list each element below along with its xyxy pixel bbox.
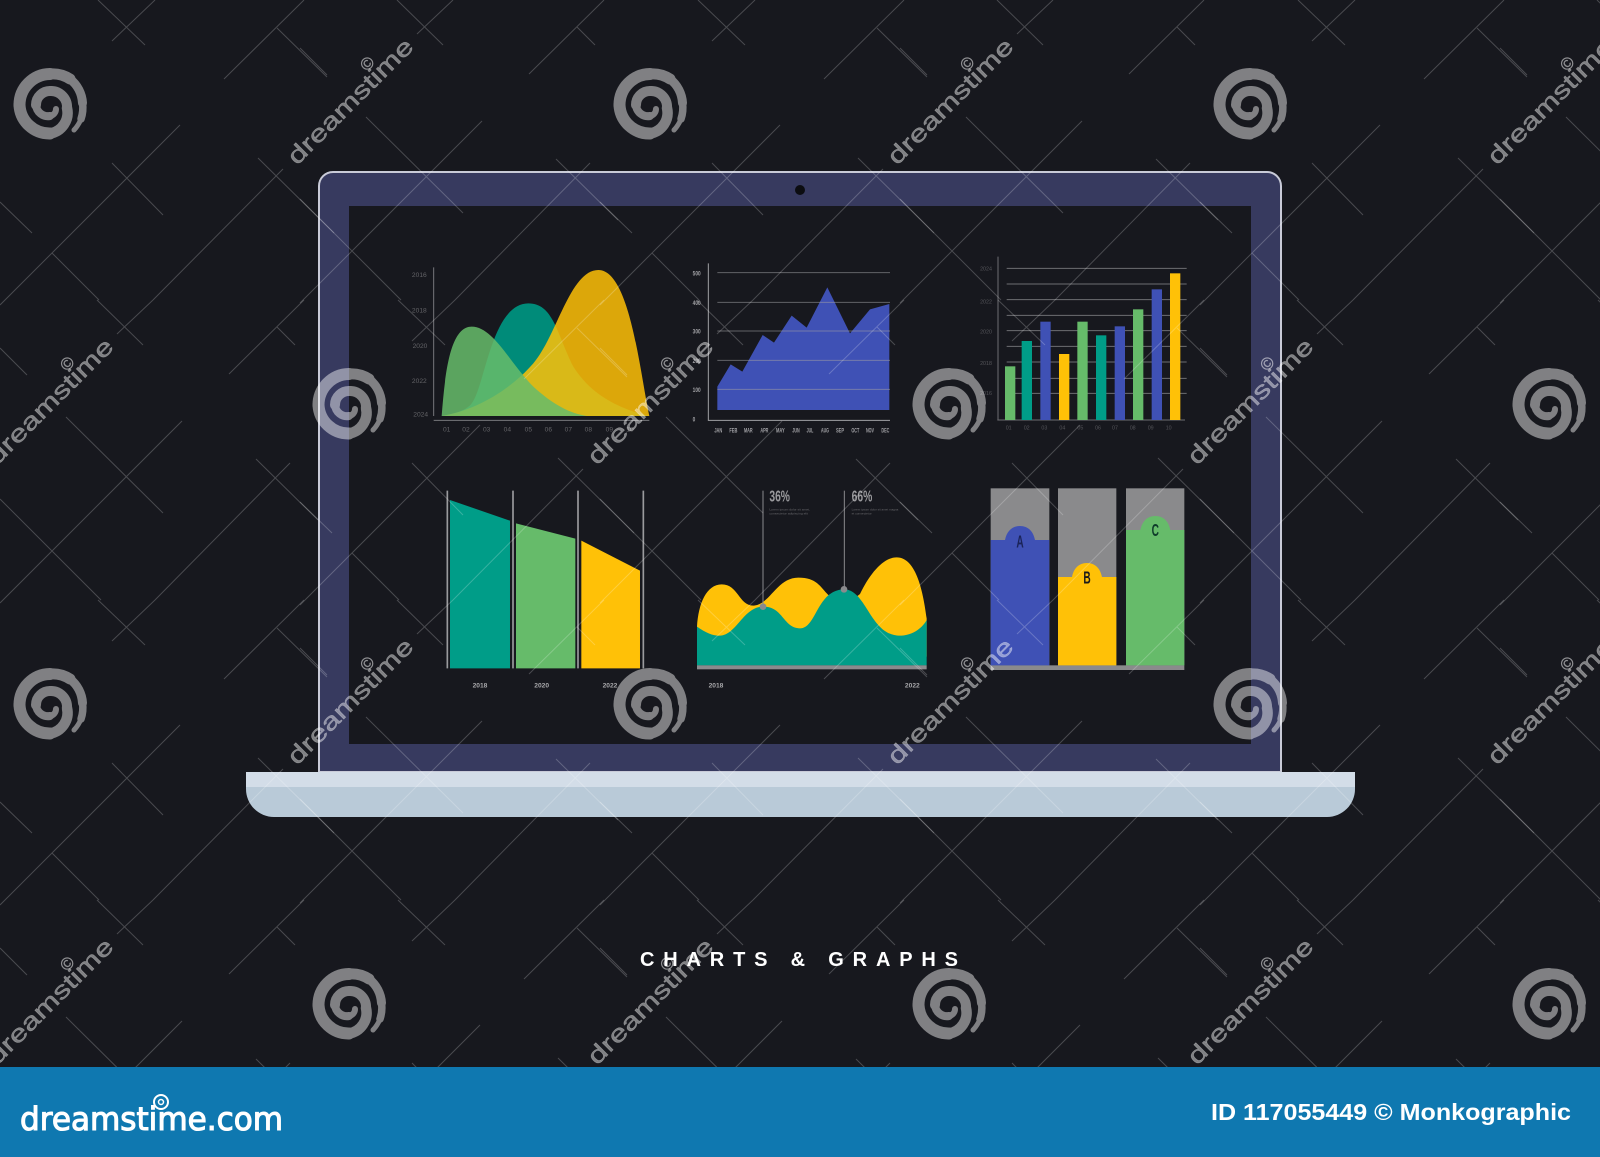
yellow column	[581, 541, 640, 668]
x axis labels: 06	[545, 426, 552, 433]
teal column	[450, 500, 510, 668]
footer bar	[0, 1067, 1600, 1157]
bars	[1005, 273, 1180, 420]
year labels: 2020	[534, 682, 549, 689]
year labels: 2018	[473, 682, 488, 689]
chart: bar chart	[980, 257, 1187, 432]
month labels: AUG	[821, 427, 829, 434]
grey tracks	[991, 488, 1184, 670]
title: CHARTS & GRAPHS	[640, 949, 958, 971]
watermark text: ©	[1556, 652, 1579, 675]
x axis labels: 10	[1166, 426, 1172, 432]
x axis labels: 05	[525, 426, 532, 433]
yellow area	[442, 270, 649, 416]
callout 36%: consectetur adipiscing elit	[769, 511, 808, 515]
year labels: 2022	[603, 682, 618, 689]
callout 36%: Lorem ipsum dolor sit amet,	[769, 508, 810, 512]
watermark text: ©	[56, 952, 79, 975]
watermark text: dreamstime	[882, 633, 1019, 770]
y axis labels	[693, 271, 701, 423]
y axis labels: 100	[693, 387, 701, 394]
y axis labels: 2024	[413, 411, 428, 418]
bar A	[991, 526, 1049, 665]
teal area	[442, 303, 649, 416]
month labels: JAN	[714, 427, 722, 434]
x axis labels: 08	[585, 426, 592, 433]
bar letters	[1016, 520, 1159, 587]
x axis labels: 08	[1130, 426, 1136, 432]
green column	[516, 523, 575, 668]
webcam	[795, 185, 805, 195]
watermark text: dreamstime	[282, 633, 419, 770]
divider lines	[447, 491, 643, 668]
month labels: SEP	[836, 427, 844, 434]
footer logo: dreamstime.com	[20, 1100, 283, 1138]
y axis labels	[412, 272, 428, 418]
month labels: JUN	[792, 427, 800, 434]
callout 66%: Lorem ipsum dolor sit amet magna	[852, 508, 899, 512]
x axis labels: 10	[626, 426, 634, 433]
x axis labels: 05	[1077, 426, 1083, 432]
month labels: DEC	[881, 427, 889, 434]
x axis labels: 06	[1095, 426, 1101, 432]
axes	[708, 263, 890, 420]
x axis labels: 07	[565, 426, 572, 433]
y axis labels: 2018	[980, 361, 992, 367]
axes and grid	[997, 257, 1187, 420]
watermark text: ©	[956, 52, 979, 75]
y axis labels: 400	[693, 300, 701, 307]
year labels	[709, 682, 920, 689]
y axis labels: 2020	[413, 343, 428, 350]
bar letters: A	[1016, 531, 1024, 551]
x axis labels: 04	[1059, 426, 1065, 432]
watermark text: dreamstime	[1182, 933, 1319, 1070]
x axis labels: 09	[606, 426, 613, 433]
watermark text: ©	[356, 652, 379, 675]
axes	[434, 267, 649, 420]
watermark text: dreamstime	[582, 933, 719, 1070]
watermark text: ©	[356, 52, 379, 75]
laptop lid	[319, 172, 1281, 772]
y axis labels: 2022	[412, 378, 427, 385]
y axis labels: 2024	[980, 267, 992, 273]
chart: blue area chart	[693, 263, 890, 434]
y axis labels: 200	[693, 358, 701, 365]
y axis labels: 300	[693, 329, 701, 336]
x axis labels	[1006, 426, 1172, 432]
watermark text: dreamstime	[1182, 333, 1319, 470]
y axis labels: 2016	[412, 272, 427, 279]
year labels: 2022	[905, 682, 920, 689]
bar letters: B	[1083, 567, 1091, 587]
watermark text: ©	[1256, 952, 1279, 975]
y axis labels: 2022	[980, 299, 992, 305]
callout 66%: 66%	[852, 489, 873, 506]
x axis labels: 01	[443, 426, 451, 433]
watermark text: ©	[956, 652, 979, 675]
laptop	[246, 172, 1355, 817]
watermark text: dreamstime	[582, 333, 719, 470]
watermark text: dreamstime	[1482, 633, 1600, 770]
x axis labels: 09	[1148, 426, 1154, 432]
month labels: OCT	[851, 427, 859, 434]
year labels	[473, 682, 618, 689]
x axis labels: 02	[1024, 426, 1030, 432]
teal wave	[697, 589, 927, 665]
footer credit: ID 117055449 © Monkographic	[1211, 1099, 1571, 1125]
chart: A B C level bars	[991, 488, 1184, 670]
watermark text: ©	[56, 352, 79, 375]
grid lines	[717, 273, 890, 389]
month labels: MAR	[744, 427, 753, 434]
watermark text: ©	[1256, 352, 1279, 375]
callout 36%: 36%	[769, 489, 790, 506]
y axis labels	[980, 267, 992, 397]
month labels: NOV	[866, 427, 874, 434]
x axis labels: 04	[504, 426, 511, 433]
yellow wave	[697, 557, 927, 657]
watermark text: dreamstime	[882, 33, 1019, 170]
month labels	[714, 427, 889, 434]
callout 66%: et consectetur	[852, 511, 872, 515]
month labels: MAY	[776, 427, 785, 434]
y axis labels: 0	[693, 416, 696, 423]
green area	[442, 327, 587, 416]
watermark text: ©	[656, 952, 679, 975]
x axis labels	[443, 426, 634, 433]
y axis labels: 2016	[980, 391, 992, 397]
month labels: FEB	[729, 427, 737, 434]
chart: wave area with callouts	[697, 489, 927, 689]
y axis labels: 2020	[980, 329, 992, 335]
bar B	[1058, 563, 1116, 665]
chart: overlapping area chart	[412, 267, 649, 433]
callout 36%	[760, 489, 810, 610]
laptop base	[246, 772, 1355, 817]
x axis labels: 03	[1041, 426, 1047, 432]
x axis labels: 03	[483, 426, 491, 433]
baseline	[697, 665, 927, 669]
watermark text: ©	[1556, 52, 1579, 75]
x axis labels: 02	[462, 426, 470, 433]
year labels: 2018	[709, 682, 724, 689]
blue area	[717, 287, 889, 410]
watermark text: dreamstime	[1482, 33, 1600, 170]
x axis labels: 01	[1006, 426, 1012, 432]
bar C	[1126, 516, 1184, 665]
y axis labels: 2018	[412, 307, 427, 314]
y axis labels: 500	[693, 271, 701, 278]
chart: slope columns	[447, 491, 643, 689]
x axis labels: 07	[1112, 426, 1118, 432]
laptop screen	[349, 206, 1251, 744]
bar letters: C	[1152, 520, 1159, 540]
month labels: APR	[760, 427, 768, 434]
month labels: JUL	[807, 427, 813, 434]
watermark text: dreamstime	[282, 33, 419, 170]
callout 66%	[841, 489, 899, 593]
watermark text: ©	[656, 352, 679, 375]
